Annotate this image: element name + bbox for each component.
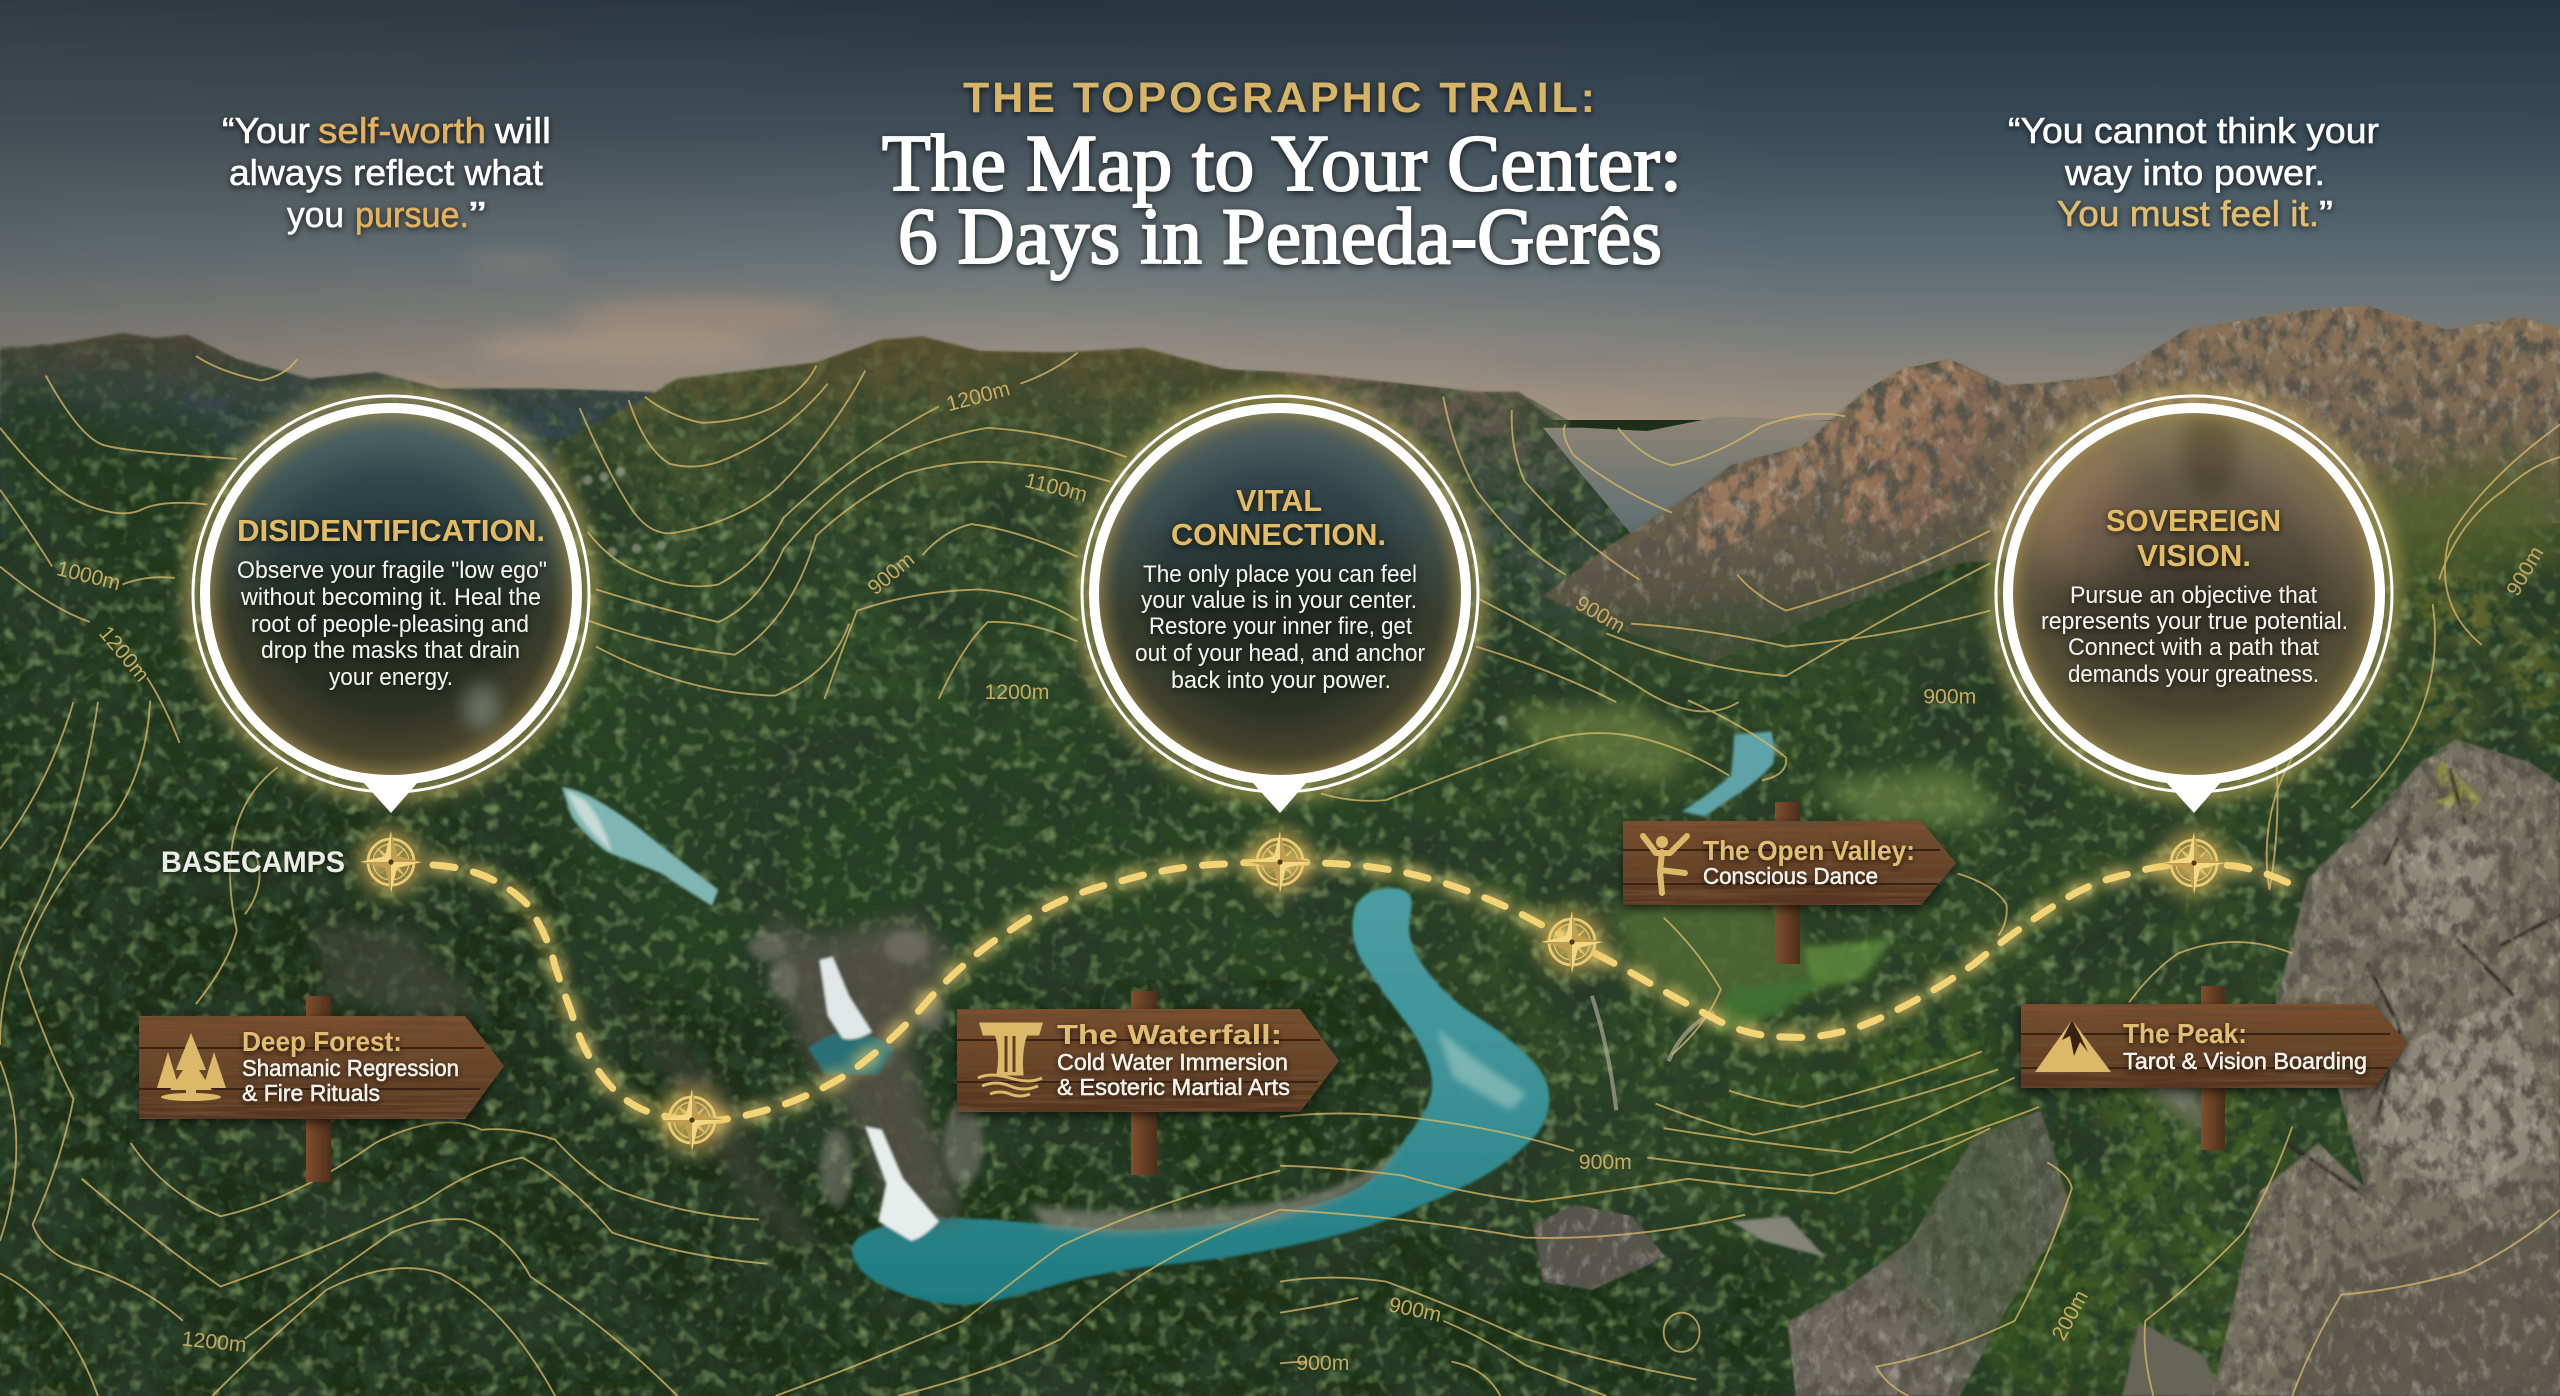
- board: [957, 1009, 1339, 1112]
- large boulders: [2212, 740, 2560, 1396]
- sign text: & Fire Rituals: [242, 1080, 380, 1106]
- glass disc: [1099, 413, 1461, 775]
- body text: back into your power.: [1171, 667, 1391, 694]
- heading: VISION.: [2137, 538, 2251, 573]
- sign text: Deep Forest:: [242, 1026, 402, 1057]
- rock texture: [1500, 300, 2560, 1396]
- body text: The only place you can feel: [1143, 561, 1417, 588]
- contour elevation labels: 900m: [2502, 543, 2548, 600]
- sign text: [2123, 1018, 2367, 1074]
- contour elevation labels: 900m: [1923, 686, 1976, 709]
- contour elevation labels: 1200m: [94, 622, 153, 686]
- quote left: “Your: [222, 110, 310, 151]
- pin glow: [1082, 396, 1478, 792]
- icon: dancer: [1643, 836, 1687, 893]
- sign text: Cold Water Immersion: [1057, 1049, 1288, 1075]
- trail: dashed golden path: [433, 862, 2300, 1120]
- quote right: [2008, 110, 2379, 234]
- contour elevation labels: [54, 377, 2548, 1375]
- sign text: & Esoteric Martial Arts: [1057, 1074, 1290, 1100]
- heading: SOVEREIGN: [2106, 503, 2281, 538]
- contour elevation labels: 1100m: [1022, 469, 1089, 507]
- sign: deep forest: [139, 996, 504, 1182]
- quote left: ”: [469, 194, 486, 235]
- icon: compass basecamp 3: [1246, 828, 1314, 896]
- pointer: [363, 782, 418, 813]
- heading: [2106, 503, 2281, 573]
- rings: [1082, 396, 1478, 792]
- quote left: pursue.: [355, 194, 469, 235]
- main title line 2: 6 Days in Peneda-Gerês: [898, 193, 1662, 281]
- far left ridge: [0, 333, 653, 539]
- icon: compass basecamp 5: [2160, 829, 2228, 897]
- pointer: [2166, 782, 2221, 813]
- sign text: [1703, 835, 1915, 889]
- quote right: You must feel it.: [2057, 193, 2319, 234]
- quote left: you: [287, 194, 344, 235]
- sign text: The Waterfall:: [1057, 1019, 1282, 1050]
- river rapids: [1437, 1029, 1527, 1110]
- body text: [2041, 582, 2348, 688]
- contour elevation labels: 1200m: [181, 1327, 248, 1357]
- quote left: [222, 110, 551, 235]
- sky: [0, 0, 2560, 420]
- quote right: “You cannot think your: [2008, 110, 2379, 151]
- body text: [237, 557, 547, 691]
- distant valley peaks: [1543, 416, 1851, 555]
- icon: compass basecamp 2: [658, 1086, 726, 1154]
- heading: [1171, 483, 1386, 552]
- sign text: The Open Valley:: [1703, 835, 1915, 866]
- body text: your value is in your center.: [1141, 587, 1417, 614]
- body text: [1135, 561, 1425, 694]
- rocks, water and fields: [310, 305, 2560, 1396]
- pools: [808, 1032, 895, 1074]
- sign text: [1057, 1019, 1290, 1100]
- post: [1131, 991, 1157, 1175]
- board: [139, 1016, 504, 1119]
- boulder crevices: [2286, 767, 2560, 1192]
- roads: [1592, 996, 1714, 1110]
- central mountain: [555, 336, 1469, 980]
- right rock mountains: [1543, 305, 2560, 661]
- basecamps label: BASECAMPS: [161, 846, 345, 879]
- sign text: [242, 1026, 459, 1106]
- gorge rocks: [767, 914, 963, 1224]
- panel: sovereign vision: [1996, 396, 2392, 813]
- upper river: [1682, 731, 1774, 816]
- glass disc: [210, 413, 572, 775]
- eyebrow heading: THE TOPOGRAPHIC TRAIL:: [963, 74, 1595, 122]
- quote left: always reflect what: [229, 152, 543, 193]
- vegetation over mountain base: [1551, 457, 2560, 1396]
- rocks bottom centre: [1533, 1205, 1665, 1290]
- sign text: Shamanic Regression: [242, 1055, 459, 1081]
- quote left: will: [494, 110, 551, 151]
- contour elevation labels: 900m: [1571, 592, 1629, 638]
- icon: trees: [157, 1033, 226, 1101]
- contour elevation labels: 900m: [1579, 1151, 1632, 1174]
- contour elevation labels: 200m: [2048, 1287, 2093, 1344]
- sign text: Tarot & Vision Boarding: [2123, 1048, 2367, 1074]
- board: [2021, 1004, 2408, 1088]
- main title line 1: The Map to Your Center:: [882, 120, 1682, 208]
- topographic contour lines: [0, 353, 2560, 1396]
- post: [1775, 802, 1800, 964]
- rock columns: [1788, 1110, 2070, 1396]
- sign text: The Peak:: [2123, 1018, 2247, 1049]
- quote left: self-worth: [318, 110, 486, 151]
- contour elevation labels: 1200m: [944, 377, 1013, 416]
- sign: the waterfall: [957, 991, 1339, 1175]
- heading: DISIDENTIFICATION.: [237, 513, 545, 548]
- body text: out of your head, and anchor: [1135, 640, 1425, 667]
- body text: Restore your inner fire, get: [1149, 613, 1412, 640]
- quote right: ”: [2319, 193, 2333, 234]
- panel: vital connection: [1082, 396, 1478, 813]
- upper waterfall river: [562, 787, 718, 906]
- board: [1623, 821, 1956, 905]
- icon: compass basecamp 4: [1538, 908, 1606, 976]
- clouds: [465, 251, 1649, 367]
- forest texture: [0, 340, 2560, 1396]
- body text: demands your greatness.: [2068, 661, 2319, 688]
- panel: disidentification: [193, 396, 589, 813]
- body text: root of people-pleasing and: [251, 611, 529, 638]
- quote right: way into power.: [2064, 152, 2325, 193]
- sign: the peak: [2021, 986, 2408, 1150]
- contour elevation labels: 1200m: [984, 681, 1049, 704]
- glass disc: [2000, 400, 2390, 790]
- contour elevation labels: 900m: [864, 548, 919, 600]
- pin glow: [193, 396, 589, 792]
- body text: your energy.: [329, 664, 453, 691]
- soft forest masses: [0, 379, 2560, 1396]
- pin glow: [1996, 396, 2392, 792]
- heading: VITAL: [1236, 483, 1322, 518]
- body text: without becoming it. Heal the: [240, 584, 541, 611]
- rocky bank: [1029, 1146, 1401, 1233]
- central right slope: [1192, 369, 1731, 686]
- post: [2201, 986, 2225, 1150]
- body text: Pursue an objective that: [2070, 582, 2317, 609]
- waterfalls: [820, 957, 872, 1039]
- villages: [583, 467, 1507, 725]
- contour elevation labels: 900m: [1387, 1293, 1443, 1327]
- rings: [1996, 396, 2392, 792]
- fields: [1502, 702, 1698, 784]
- contour elevation labels: 900m: [1296, 1352, 1349, 1375]
- icon: compass basecamp 1: [357, 828, 425, 896]
- sign: the open valley: [1623, 802, 1956, 964]
- body text: Observe your fragile "low ego": [237, 557, 547, 584]
- icon: mountain: [2035, 1020, 2111, 1072]
- heading: CONNECTION.: [1171, 517, 1386, 552]
- pointer: [1252, 782, 1307, 813]
- sign text: Conscious Dance: [1703, 863, 1878, 889]
- body text: represents your true potential.: [2041, 608, 2348, 635]
- body text: drop the masks that drain: [261, 637, 520, 664]
- main river: [852, 888, 1549, 1305]
- body text: Connect with a path that: [2068, 634, 2319, 661]
- title block: [882, 74, 1682, 281]
- contour elevation labels: 1000m: [54, 557, 123, 595]
- icon: waterfall: [978, 1024, 1042, 1096]
- ridges and forest bases: [0, 333, 2560, 1396]
- post: [306, 996, 331, 1182]
- rings: [193, 396, 589, 792]
